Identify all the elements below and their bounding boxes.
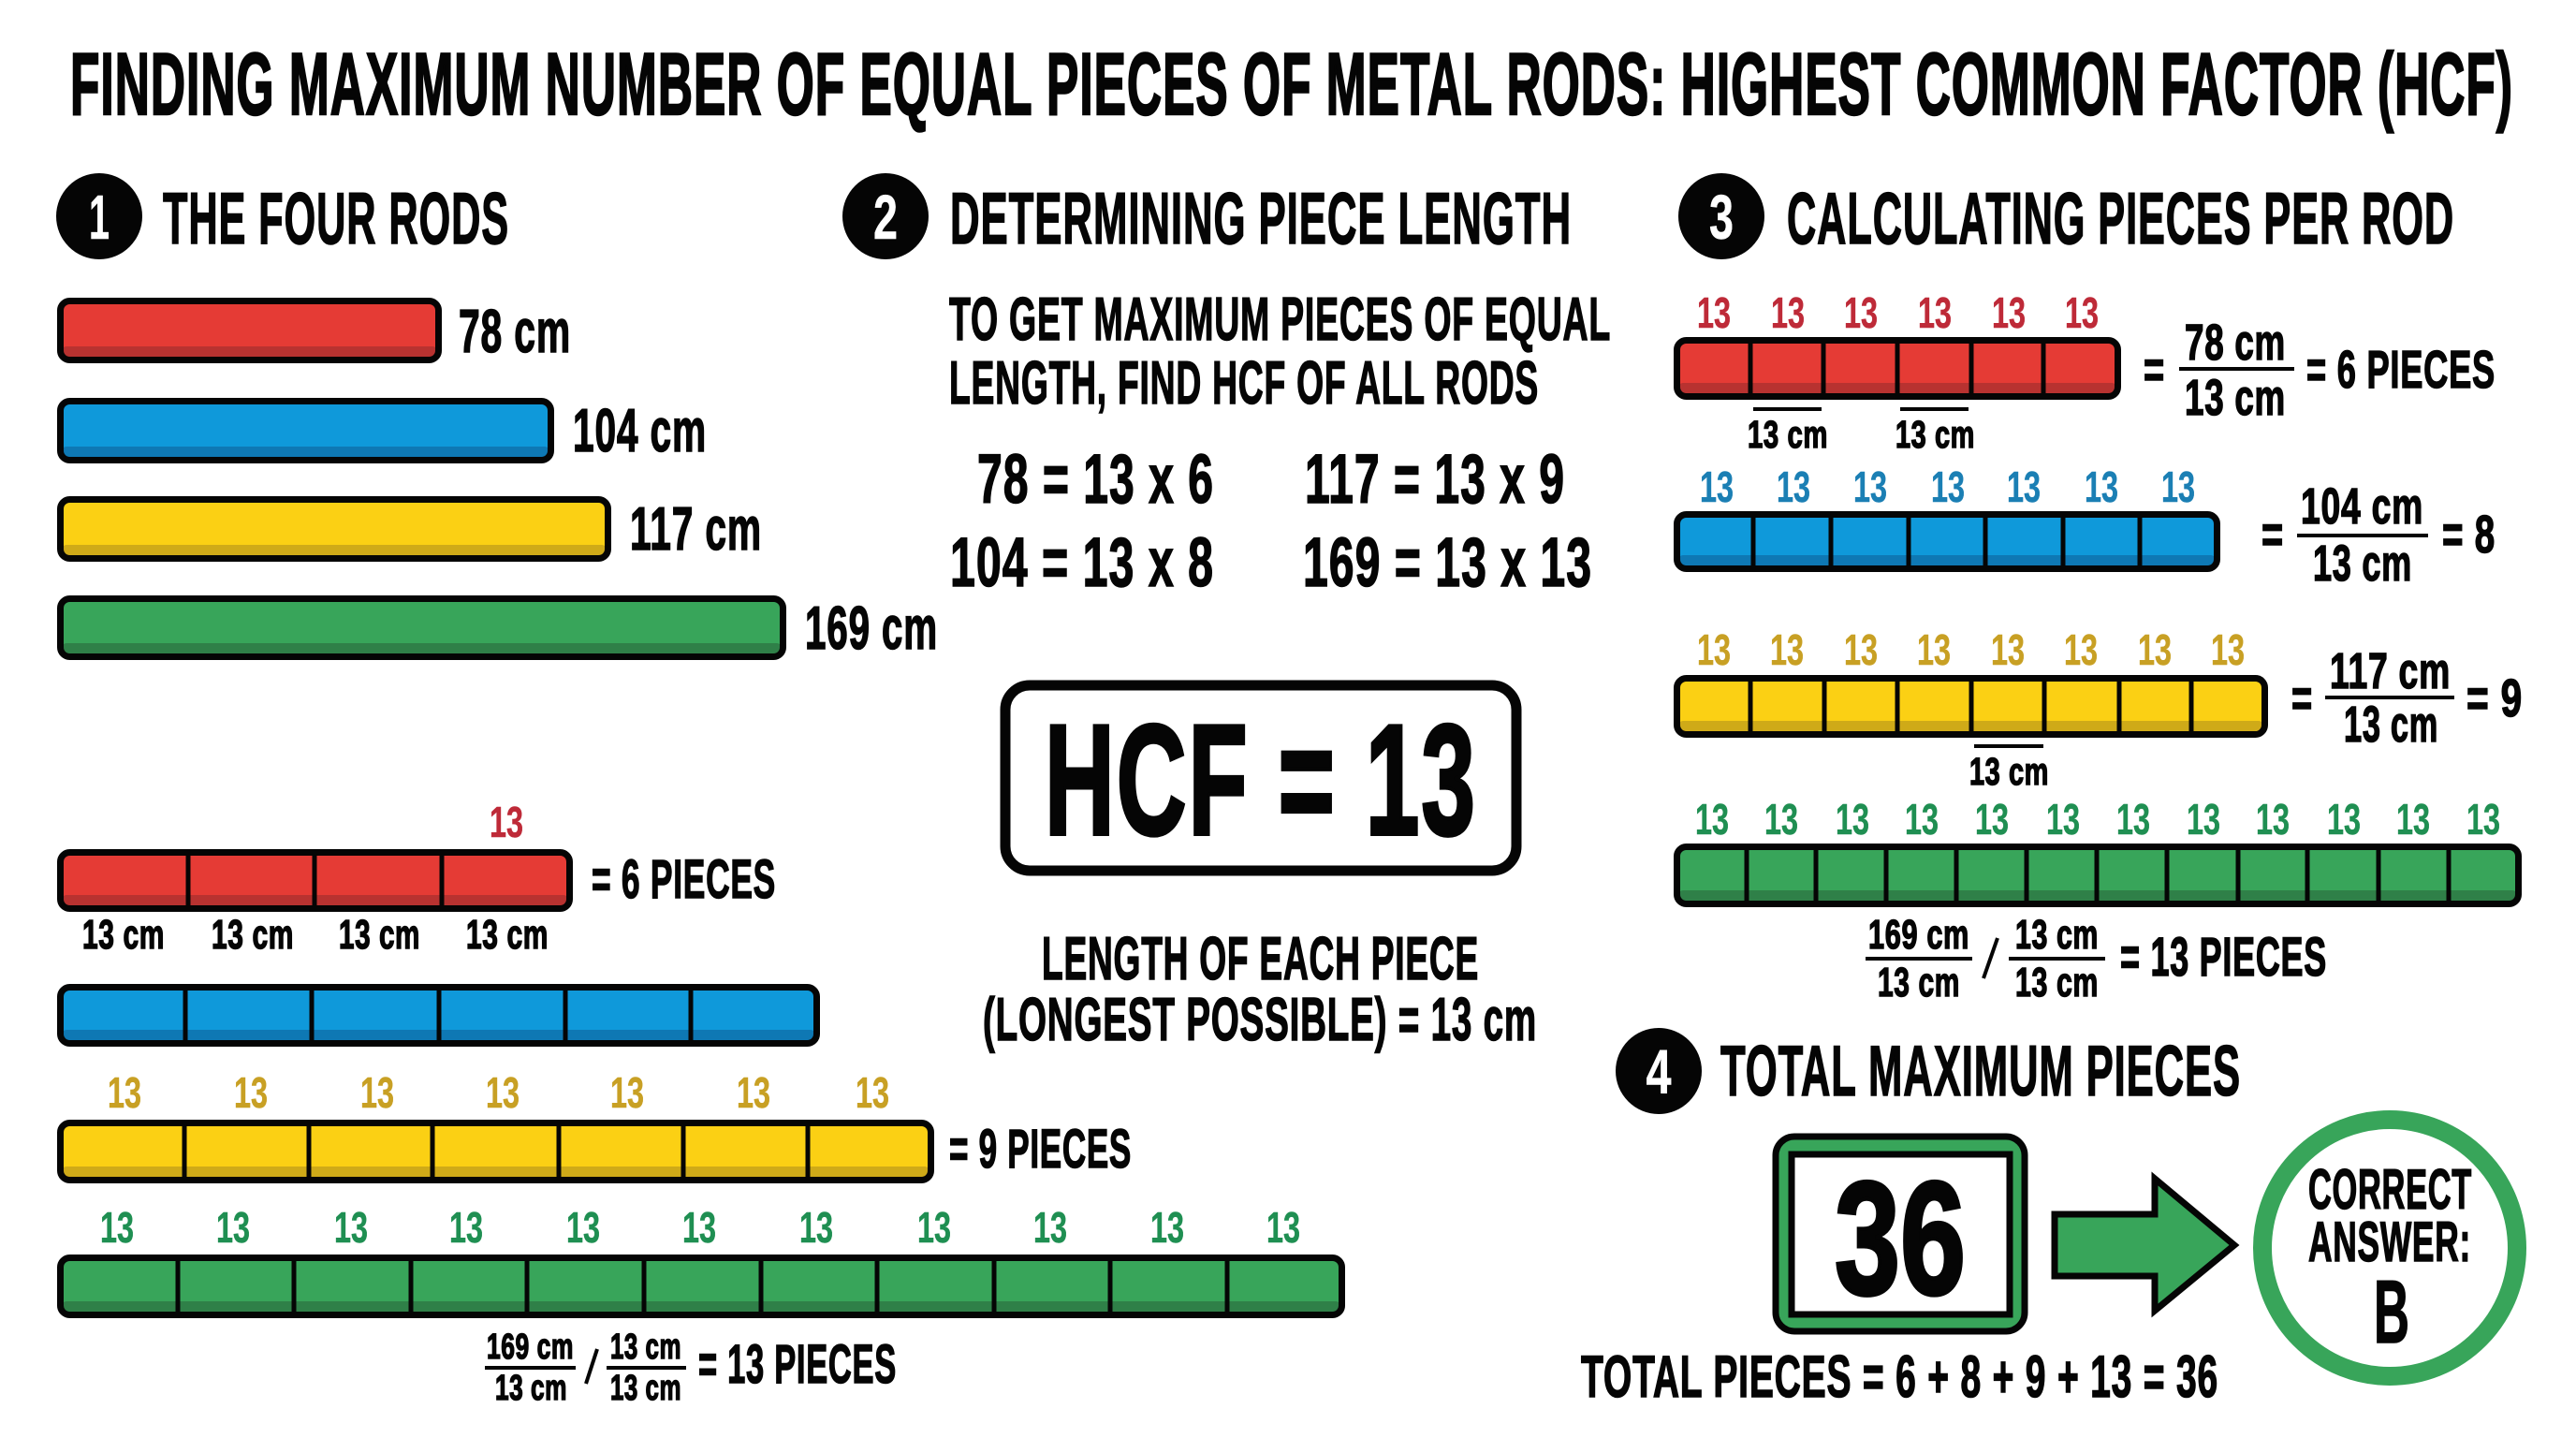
yellow rod 9 pieces: 13 (1844, 625, 1878, 674)
HCF result box (1005, 685, 1516, 871)
blue rod 8 pieces: 13 (2085, 462, 2118, 511)
section 2 heading: DETERMINING PIECE LENGTH (950, 177, 1572, 259)
red rod cut into pieces: 13 cm (339, 912, 420, 958)
green rod cut into pieces: 13 (449, 1203, 483, 1252)
green rod cut into pieces: 13 (1033, 1203, 1067, 1252)
green rod cut into pieces: 13 (216, 1203, 250, 1252)
section 2 heading (842, 173, 1572, 259)
green rod 13 pieces: 13 (2187, 795, 2220, 844)
red rod 6 pieces: 13 cm (1895, 413, 1975, 456)
green rod 13 pieces: 13 (2256, 795, 2290, 844)
formula: green rod right: 13 cm (1878, 960, 1960, 1005)
yellow rod 9 pieces: 13 (2211, 625, 2245, 674)
green rod cut into pieces: 13 (917, 1203, 951, 1252)
red rod cut into pieces: = 6 PIECES (592, 849, 776, 910)
length of each piece text: LENGTH OF EACH PIECE (1042, 924, 1479, 992)
green rod 13 pieces: 13 (1905, 795, 1939, 844)
green rod cut into pieces: 13 (566, 1203, 600, 1252)
section 4 heading (1616, 1028, 2241, 1114)
panel: the four rods (56, 173, 1342, 1408)
formula: green rod left: 13 cm (610, 1369, 681, 1408)
green rod 13 pieces: 13 (2327, 795, 2361, 844)
blue rod 8 pieces: 13 (1700, 462, 1734, 511)
formula: green rod left: 13 cm (495, 1369, 567, 1408)
blue rod 8 pieces: 13 cm (2313, 536, 2412, 592)
blue rod cut into pieces (60, 987, 817, 1044)
panel: total maximum pieces (1581, 1028, 2517, 1410)
green rod 13 pieces: 13 (2116, 795, 2150, 844)
yellow rod 117 cm: 117 cm (630, 494, 762, 563)
panel: determining piece length (842, 173, 1611, 1053)
section 3 heading: 3 (1709, 183, 1734, 253)
red rod cut into pieces (60, 798, 776, 958)
blue rod 8 pieces: 13 (2161, 462, 2195, 511)
yellow rod 9 pieces: 13 cm (1969, 750, 2049, 793)
section 2 heading: 2 (873, 183, 898, 253)
blue rod 8 pieces: = (2261, 505, 2284, 565)
red rod 6 pieces: 13 (1918, 288, 1952, 337)
red rod 6 pieces: 13 (1771, 288, 1805, 337)
red rod cut into pieces: 13 cm (212, 912, 294, 958)
yellow rod 9 pieces (1676, 625, 2523, 793)
formula: green rod right: 13 cm (2015, 912, 2099, 958)
blue rod 8 pieces: 13 (1931, 462, 1965, 511)
green rod 13 pieces: 13 (1836, 795, 1869, 844)
green rod 13 pieces (1676, 795, 2519, 904)
blue rod 8 pieces: = 8 (2442, 505, 2496, 565)
formula: green rod left: 13 cm (610, 1328, 681, 1367)
total 36 box (1776, 1137, 2025, 1331)
green rod cut into pieces: 13 (100, 1203, 134, 1252)
red rod 6 pieces: 13 cm (2185, 370, 2286, 426)
HCF result box: HCF = 13 (1045, 692, 1477, 868)
green rod 13 pieces: 13 (1695, 795, 1729, 844)
red rod 78 cm (60, 297, 571, 365)
arrow (2055, 1179, 2234, 1311)
green rod 13 pieces: 13 (1764, 795, 1798, 844)
formula: green rod right (1866, 912, 2327, 1005)
green rod 13 pieces: 13 (2396, 795, 2430, 844)
factorisation equations (950, 440, 1592, 601)
length of each piece text (983, 924, 1537, 1053)
formula: green rod right: 13 cm (2015, 960, 2099, 1005)
green rod 13 pieces: 13 (1975, 795, 2009, 844)
yellow rod 9 pieces: 13 (1991, 625, 2025, 674)
red rod 6 pieces: 13 (1697, 288, 1731, 337)
section 1 heading (56, 173, 509, 259)
yellow rod 9 pieces: 13 cm (2344, 697, 2438, 753)
yellow rod 9 pieces: 13 (2064, 625, 2098, 674)
red rod 6 pieces: 13 (2065, 288, 2099, 337)
red rod cut into pieces: 13 cm (466, 912, 549, 958)
blue rod 8 pieces: 13 (1777, 462, 1810, 511)
section 4 heading: 4 (1646, 1037, 1672, 1108)
blue rod 8 pieces (1676, 462, 2496, 592)
green rod cut into pieces: 13 (1150, 1203, 1184, 1252)
factorisation equations: 104 = 13 x 8 (950, 523, 1214, 601)
red rod cut into pieces: 13 cm (82, 912, 165, 958)
formula: green rod right: = 13 PIECES (2120, 927, 2327, 988)
explanation text: TO GET MAXIMUM PIECES OF EQUAL (949, 285, 1611, 353)
section 1 heading: 1 (89, 183, 110, 253)
red rod 6 pieces: 78 cm (2185, 315, 2286, 371)
green rod 13 pieces: 13 (2466, 795, 2500, 844)
red rod 78 cm: 78 cm (459, 297, 571, 365)
formula: green rod right: 169 cm (1868, 912, 1969, 958)
formula: green rod left: = 13 PIECES (698, 1334, 897, 1395)
length of each piece text: (LONGEST POSSIBLE) = 13 cm (983, 985, 1537, 1053)
correct answer circle (2262, 1120, 2517, 1376)
green rod cut into pieces: 13 (1266, 1203, 1300, 1252)
total 36 box: 36 (1835, 1149, 1966, 1328)
formula: green rod left: 169 cm (487, 1328, 574, 1367)
factorisation equations: 117 = 13 x 9 (1305, 440, 1565, 518)
blue rod 8 pieces: 13 (2007, 462, 2041, 511)
formula: green rod left (485, 1328, 897, 1408)
yellow rod cut into pieces: = 9 PIECES (949, 1119, 1132, 1180)
green rod cut into pieces: 13 (334, 1203, 368, 1252)
blue rod 8 pieces: 104 cm (2301, 478, 2423, 535)
red rod cut into pieces: 13 (490, 798, 523, 846)
correct answer circle: B (2374, 1262, 2409, 1362)
yellow rod cut into pieces (60, 1068, 1132, 1181)
blue rod 8 pieces: 13 (1853, 462, 1887, 511)
yellow rod 9 pieces: 13 (1697, 625, 1731, 674)
factorisation equations: 78 = 13 x 6 (977, 440, 1214, 518)
red rod 6 pieces: 13 (1844, 288, 1878, 337)
blue rod 104 cm: 104 cm (573, 396, 707, 464)
yellow rod cut into pieces: 13 (234, 1068, 268, 1117)
yellow rod cut into pieces: 13 (486, 1068, 520, 1117)
yellow rod cut into pieces: 13 (108, 1068, 141, 1117)
red rod 6 pieces: = (2144, 340, 2165, 400)
yellow rod 117 cm (60, 494, 762, 563)
green rod cut into pieces: 13 (682, 1203, 716, 1252)
yellow rod cut into pieces: 13 (856, 1068, 889, 1117)
green rod cut into pieces (60, 1203, 1342, 1315)
red rod 6 pieces (1676, 288, 2496, 456)
yellow rod 9 pieces: = 9 (2466, 668, 2523, 728)
explanation text: LENGTH, FIND HCF OF ALL RODS (949, 348, 1539, 417)
panel: calculating pieces per rod (1676, 173, 2523, 1005)
red rod 6 pieces: 13 cm (1748, 413, 1828, 456)
yellow rod cut into pieces: 13 (360, 1068, 394, 1117)
yellow rod 9 pieces: 117 cm (2330, 643, 2451, 699)
yellow rod cut into pieces: 13 (610, 1068, 644, 1117)
explanation text (949, 285, 1611, 417)
yellow rod 9 pieces: = (2291, 668, 2313, 728)
yellow rod 9 pieces: 13 (2138, 625, 2172, 674)
green rod 13 pieces: 13 (2046, 795, 2080, 844)
yellow rod 9 pieces: 13 (1770, 625, 1804, 674)
green rod 169 cm: 169 cm (805, 594, 938, 662)
green rod cut into pieces: 13 (799, 1203, 833, 1252)
green rod 169 cm (60, 594, 938, 662)
factorisation equations: 169 = 13 x 13 (1303, 523, 1592, 601)
red rod 6 pieces: 13 (1992, 288, 2026, 337)
yellow rod cut into pieces: 13 (737, 1068, 770, 1117)
yellow rod 9 pieces: 13 (1917, 625, 1951, 674)
section 1 heading: THE FOUR RODS (163, 177, 509, 259)
blue rod 104 cm (60, 396, 707, 464)
